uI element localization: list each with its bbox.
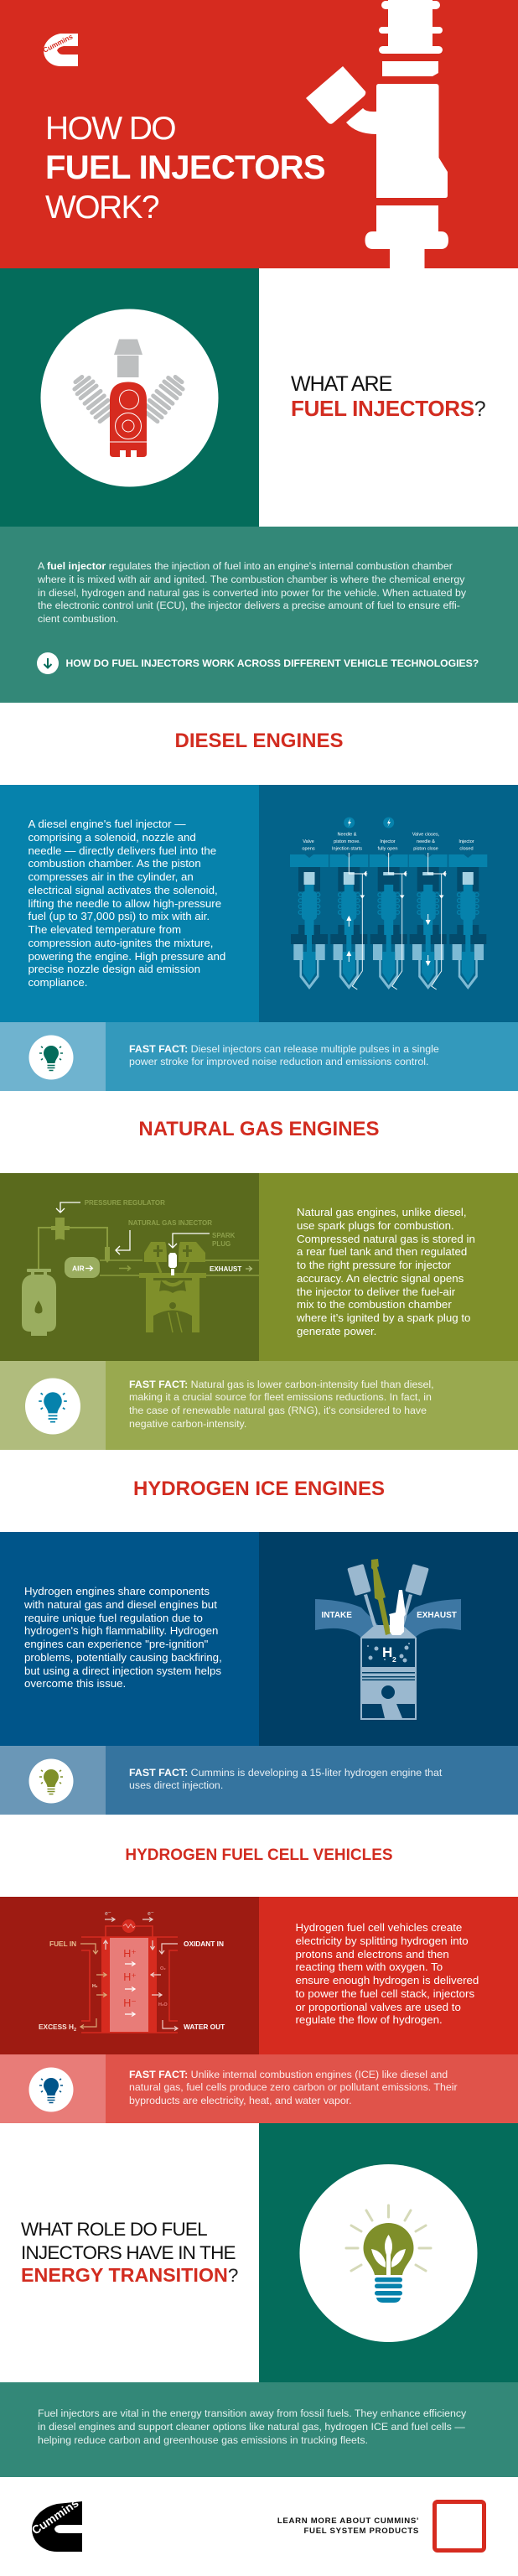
text: definition: A fuel injector regulates the injection of fuel into an engine's internal combustion chamber	[38, 560, 453, 572]
heading: energy transition question: WHAT ROLE DO FUEL	[21, 2219, 207, 2240]
text: natural gas fast fact: negative carbon-intensity.	[129, 1418, 246, 1430]
text: diesel description: precise nozzle design aid emission	[28, 963, 200, 975]
proton arrows	[125, 1962, 135, 2016]
logo: Cummins white: Cummins	[41, 32, 75, 55]
labels: injector stages: Valve closes,	[412, 832, 440, 837]
injector: fully open	[370, 853, 408, 989]
chart: fuel cell stack: H₂O	[158, 2002, 168, 2007]
panel: engine icon on green	[0, 268, 259, 527]
cell stack	[101, 1937, 157, 2033]
labels: injector stages: piston close	[413, 847, 438, 852]
text: diesel description: lifting the needle to allow high-pressure	[28, 897, 221, 909]
text: natural gas description	[297, 1206, 475, 1337]
text: diesel fast fact	[129, 1043, 439, 1067]
text: natural gas description: a rear fuel tank and then regulated	[297, 1245, 467, 1258]
valves	[347, 1564, 429, 1626]
hydrogen injector	[371, 1559, 391, 1635]
hydrogen symbol and bubbles: H	[382, 1644, 392, 1660]
ports	[315, 1599, 461, 1638]
text: fuel cell description: reacting them with oxygen. To	[295, 1961, 443, 1973]
text: definition: in diesel, hydrogen and natural gas is converted into power for the vehicle. When actuated by	[38, 587, 466, 599]
gas tank	[22, 1269, 56, 1336]
text: diesel description: comprising a solenoid, nozzle and	[28, 831, 196, 844]
text: natural gas description: use spark plugs for combustion.	[297, 1219, 454, 1232]
logo: Cummins black: Cummins	[29, 2496, 81, 2537]
text: hydrogen ICE description: but using a direct injection system helps	[24, 1664, 221, 1677]
panel: natural gas diagram	[0, 1173, 259, 1361]
text: natural gas description: Natural gas engines, unlike diesel,	[297, 1206, 467, 1218]
panel: what are fuel injectors text	[0, 527, 518, 703]
text: diesel description: A diesel engine's fuel injector —	[28, 818, 186, 830]
text: learn more: FUEL SYSTEM PRODUCTS	[303, 2527, 419, 2536]
icon: engine in white circle	[40, 309, 218, 486]
labels: injector stages: piston move.	[334, 839, 360, 844]
icon: white fuel injector	[306, 0, 448, 268]
injector: valve opens	[290, 854, 329, 989]
text: hydrogen ICE description: with natural gas and diesel engines but	[24, 1598, 217, 1611]
text: definition: where it is mixed with air and ignited. The combustion chamber is where the chemical energy	[38, 574, 464, 585]
text: diesel description: powering the engine. High pressure and	[28, 949, 225, 963]
hydrogen symbol and bubbles	[382, 1644, 396, 1664]
heading: what are fuel injectors: WHAT ARE	[291, 372, 391, 396]
text: natural gas description: accuracy. An electric signal opens	[297, 1272, 464, 1285]
icon: lightbulb	[0, 1361, 106, 1450]
text: hydrogen ICE description	[24, 1585, 222, 1690]
labels: OXIDANT IN	[184, 1940, 224, 1948]
hydrogen ions: H⁺	[123, 1948, 137, 1960]
text: natural gas fast fact: FAST FACT: Natural gas is lower carbon-intensity fuel than diesel,	[129, 1379, 434, 1390]
air box: AIR	[72, 1265, 85, 1273]
text: fuel cell description: electricity by splitting hydrogen into	[295, 1935, 469, 1947]
electron markers	[104, 1911, 154, 1950]
title text: FUEL INJECTORS	[45, 149, 325, 186]
text: natural gas description: Compressed natural gas is stored in	[297, 1233, 475, 1244]
injector: needle and piston move	[329, 853, 368, 989]
icon: leaf lightbulb	[300, 2164, 478, 2342]
labels: EXCESS H	[39, 2023, 74, 2031]
panel: hydrogen engine diagram	[259, 1532, 518, 1746]
text: diesel fast fact: FAST FACT: Diesel injectors can release multiple pulses in a single	[129, 1043, 439, 1055]
text: hydrogen ICE fast fact: FAST FACT: Cummins is developing a 15-liter hydrogen engine that	[129, 1766, 442, 1778]
injector: valve closes	[409, 853, 448, 989]
text: diesel description: compression auto-ignites the mixture,	[28, 937, 213, 949]
text: fuel cell description	[295, 1921, 479, 2026]
housing lines and circuit	[81, 1926, 178, 2033]
intake and exhaust ports	[100, 1260, 259, 1275]
text: learn more: LEARN MORE ABOUT CUMMINS'	[277, 2516, 419, 2526]
electron markers: e⁻	[105, 1911, 111, 1917]
text: energy transition summary: Fuel injectors are vital in the energy transition away from fossil fuels. They enhance efficiency	[38, 2407, 466, 2419]
heading: what are fuel injectors	[291, 372, 485, 421]
labels: injector stages: Valve	[303, 839, 314, 844]
spark plug	[168, 1253, 177, 1275]
text: definition	[38, 560, 466, 625]
chart: fuel cell stack: O₂	[160, 1966, 166, 1971]
labels	[85, 1199, 241, 1273]
text: fuel cell description: to power the fuel cell stack, injectors	[295, 1987, 474, 2000]
panel: energy transition text	[0, 2382, 518, 2477]
text: fuel cell fast fact: byproducts are electricity, heat, and water vapor.	[129, 2095, 352, 2106]
text: hydrogen ICE fast fact	[129, 1766, 443, 1791]
text: diesel description: fuel (up to 37,000 psi) to mix with air.	[28, 910, 210, 922]
load symbol	[122, 1919, 136, 1933]
tan flow arrows	[80, 1944, 106, 2029]
icon: red QR frame	[433, 2500, 486, 2553]
heading: hydrogen ICE engines: HYDROGEN ICE ENGINES	[133, 1478, 385, 1500]
panel: energy transition icon	[259, 2123, 518, 2382]
text: hydrogen ICE fast fact: uses direct injection.	[129, 1779, 223, 1791]
text: hydrogen ICE description: problems, potentially causing backfiring,	[24, 1651, 222, 1664]
icon: lightbulb	[0, 1746, 106, 1815]
labels: WATER OUT	[184, 2023, 225, 2031]
text: fuel cell fast fact	[129, 2068, 458, 2106]
text: diesel description: electrical signal activates the solenoid,	[28, 884, 218, 896]
heading: what are fuel injectors: FUEL INJECTORS?	[291, 396, 485, 421]
labels: SPARK	[212, 1232, 236, 1239]
title text	[45, 111, 325, 226]
text: hydrogen ICE description: overcome this issue.	[24, 1677, 126, 1690]
chart: fuel cell stack: H₂	[92, 1984, 98, 1989]
chart: five diesel injector stages	[290, 817, 488, 989]
labels: injector stages: Injector	[380, 839, 396, 844]
spark plug	[389, 1590, 406, 1635]
panel: diesel injector diagram	[259, 785, 518, 1022]
panel: hydrogen ICE fast fact	[0, 1746, 518, 1815]
labels: injector stages: fully open	[378, 847, 397, 852]
text: learn more	[277, 2516, 419, 2536]
port labels	[321, 1611, 457, 1620]
labels: injector stages: Injector	[458, 839, 474, 844]
text: natural gas description: mix to the combustion chamber	[297, 1298, 452, 1311]
text: diesel description	[28, 818, 225, 989]
fuel line and regulator	[39, 1218, 110, 1269]
text: hydrogen ICE description: hydrogen's high flammability. Hydrogen	[24, 1624, 218, 1637]
electron markers: e⁻	[148, 1911, 154, 1917]
panel: fuel cell diagram	[0, 1897, 259, 2054]
text: energy transition summary	[38, 2407, 466, 2446]
panel: hydrogen ICE text	[0, 1532, 259, 1746]
text: definition: the electronic control unit (ECU), the injector delivers a precise amount of fuel to ensure effi-	[38, 600, 460, 611]
labels: injector stages: needle &	[417, 839, 435, 844]
leader arrows	[56, 1202, 210, 1254]
hydrogen ions: H⁻	[123, 1997, 137, 2009]
icon: down arrow	[37, 652, 59, 674]
text: diesel description: compresses air in the cylinder, an	[28, 870, 194, 883]
labels: injector stages: closed	[459, 847, 474, 852]
labels: injector stages	[302, 832, 474, 852]
port labels: EXHAUST	[417, 1611, 457, 1620]
text: section lead-in: HOW DO FUEL INJECTORS WORK ACROSS DIFFERENT VEHICLE TECHNOLOGIES?	[65, 657, 479, 669]
text: fuel cell fast fact: natural gas, fuel cells produce zero carbon or pollutant emissions. Their	[129, 2081, 458, 2093]
labels: injector stages: Injection starts	[332, 847, 362, 852]
text: fuel cell description: regulate the flow of hydrogen.	[295, 2013, 443, 2026]
labels: NATURAL GAS INJECTOR	[128, 1219, 212, 1227]
labels: injector stages: opens	[302, 847, 315, 852]
text: fuel cell description: or proportional valves are used to	[295, 2001, 461, 2012]
heading: hydrogen fuel cell vehicles: HYDROGEN FUEL CELL VEHICLES	[125, 1846, 393, 1864]
labels: PRESSURE REGULATOR	[85, 1199, 165, 1207]
labels: injector stages: Needle &	[337, 832, 357, 837]
logo: Cummins white	[41, 32, 78, 66]
text: energy transition summary: helping reduce carbon and greenhouse gas emissions in trucking fleets.	[38, 2434, 368, 2446]
engine cylinder	[139, 1242, 206, 1332]
heading: energy transition question	[21, 2219, 238, 2286]
text: natural gas description: the injector to deliver the fuel-air	[297, 1285, 455, 1298]
labels: FUEL IN	[49, 1940, 76, 1948]
text: diesel description: The elevated temperature from	[28, 923, 181, 936]
text: fuel cell description: ensure enough hydrogen is delivered	[295, 1974, 479, 1987]
heading: diesel engines: DIESEL ENGINES	[175, 730, 343, 752]
labels: EXHAUST	[210, 1265, 241, 1273]
injector: closed	[448, 854, 487, 989]
heading: energy transition question: INJECTORS HAVE IN THE	[21, 2242, 236, 2262]
text: hydrogen ICE description: Hydrogen engines share components	[24, 1585, 210, 1597]
air box	[65, 1257, 100, 1278]
port labels: INTAKE	[321, 1611, 352, 1620]
icon: lightbulb	[0, 1022, 106, 1091]
text: natural gas description: to the right pressure for injector	[297, 1259, 451, 1271]
title text: WORK?	[45, 190, 158, 226]
cylinder and piston	[360, 1625, 417, 1720]
text: fuel cell description: Hydrogen fuel cell vehicles create	[295, 1921, 462, 1934]
text: natural gas fast fact: making it a crucial source for fleet emissions reductions. In fact, in	[129, 1391, 432, 1403]
text: natural gas fast fact	[129, 1379, 434, 1430]
chart: fuel cell stack	[39, 1911, 225, 2033]
text: natural gas fast fact: the case of renewable natural gas (RNG), it's considered to have	[129, 1405, 427, 1416]
panel: natural gas fast fact	[0, 1361, 518, 1450]
hydrogen symbol and bubbles: 2	[392, 1655, 396, 1664]
text: diesel description: compliance.	[28, 976, 87, 989]
text: fuel cell fast fact: FAST FACT: Unlike internal combustion engines (ICE) like diesel and	[129, 2068, 448, 2080]
hydrogen ions	[123, 1948, 137, 2009]
text: diesel fast fact: power stroke for improved noise reduction and emissions control.	[129, 1056, 428, 1067]
labels: PLUG	[212, 1240, 231, 1248]
text: hydrogen ICE description: engines can experience "pre-ignition"	[24, 1638, 208, 1650]
oxidant and water arrows	[151, 1944, 178, 2031]
text: natural gas description: generate power.	[297, 1325, 376, 1337]
panel: diesel fast fact	[0, 1022, 518, 1091]
icon: lightbulb	[0, 2054, 106, 2123]
text: hydrogen ICE description: require unique fuel regulation due to	[24, 1612, 203, 1623]
chart: natural gas engine system	[22, 1199, 259, 1336]
title text: HOW DO	[45, 111, 175, 147]
panel: fuel cell fast fact	[0, 2054, 518, 2123]
hydrogen ions: H⁺	[123, 1971, 137, 1983]
heading: natural gas engines: NATURAL GAS ENGINES	[138, 1118, 380, 1140]
text: energy transition summary: in diesel engines and support cleaner options like natural gas, hydrogen ICE and fuel cells —	[38, 2421, 465, 2433]
text: diesel description: combustion chamber. As the piston	[28, 857, 201, 870]
panel: diesel text	[0, 785, 259, 1022]
heading: energy transition question: ENERGY TRANSITION?	[21, 2264, 238, 2286]
chart: hydrogen engine cross section	[315, 1559, 461, 1720]
panel: fuel cell text	[259, 1897, 518, 2054]
text: definition: cient combustion.	[38, 613, 118, 625]
panel: title header	[0, 0, 518, 268]
text: natural gas description: where it’s ignited by a spark plug to	[297, 1311, 470, 1324]
text: diesel description: needle — directly delivers fuel into the	[28, 844, 216, 857]
panel: natural gas text	[259, 1173, 518, 1361]
labels: 2	[74, 2028, 76, 2033]
text: fuel cell description: protons and electrons and then	[295, 1947, 449, 1961]
icons: electric signal bolts	[344, 817, 394, 828]
labels	[39, 1940, 225, 2033]
